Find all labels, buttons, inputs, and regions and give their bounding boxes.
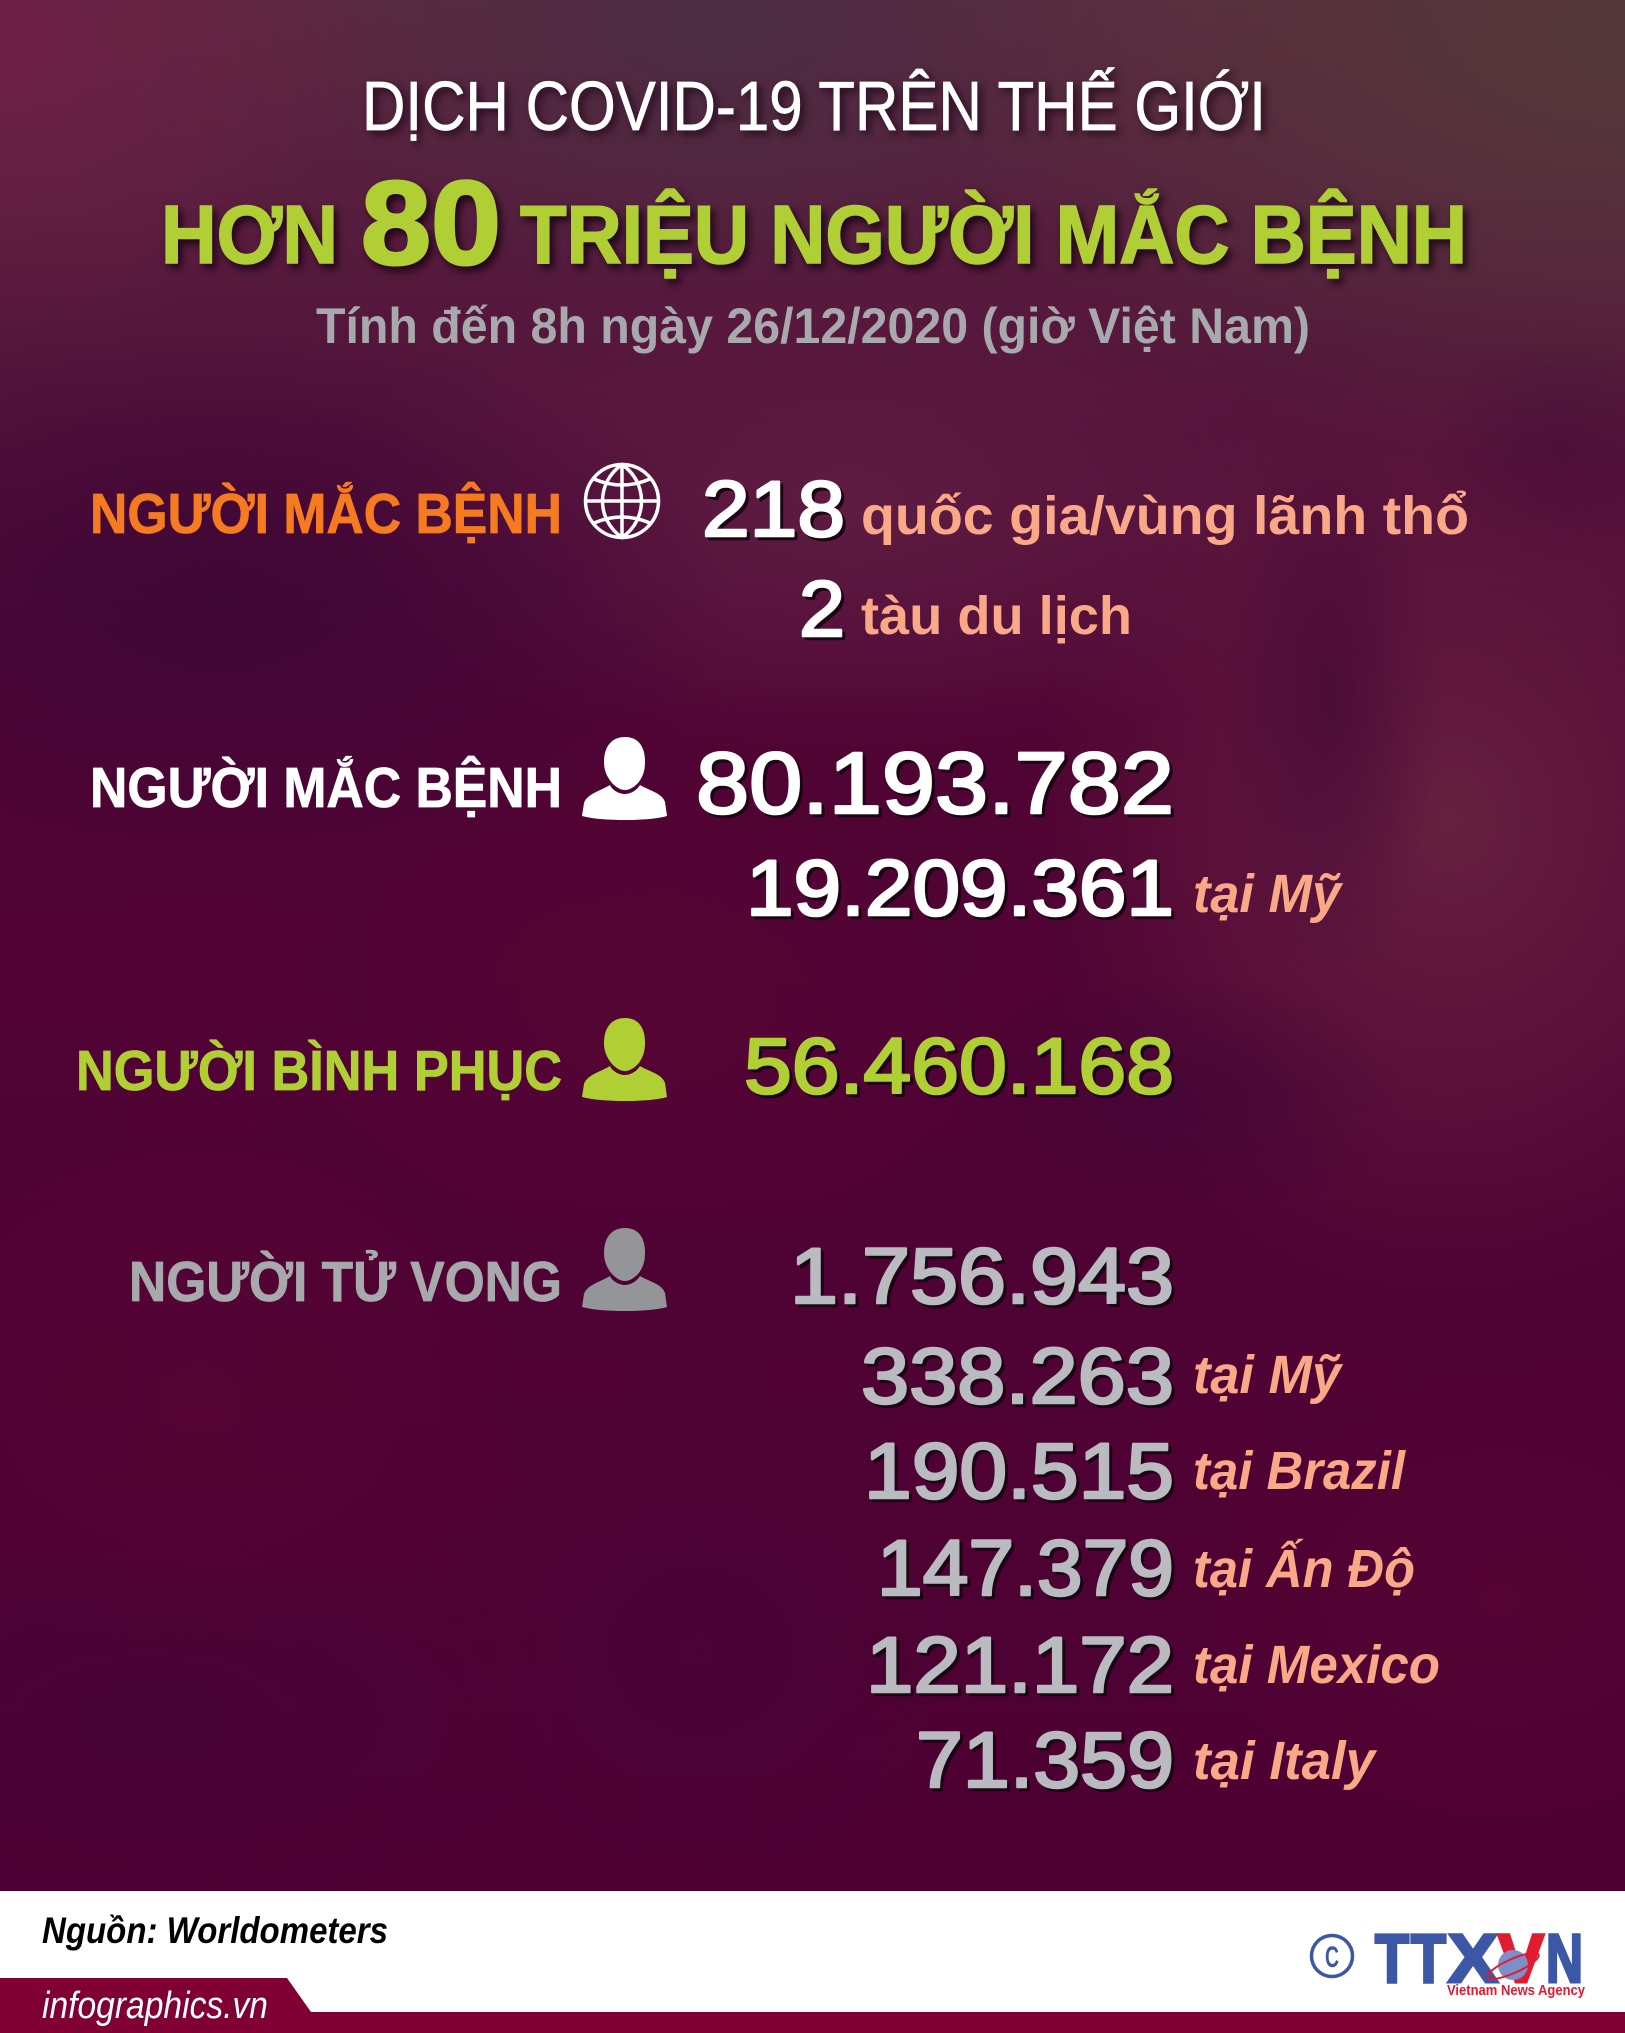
label: deaths: NGƯỜI TỬ VONG — [129, 1249, 562, 1314]
icon: person grey — [582, 1228, 667, 1311]
row: countries: tàu du lịch — [861, 586, 1132, 646]
value: recovered: 56.460.168 — [744, 1021, 1174, 1110]
value: Italy deaths: tại Italy — [1193, 1731, 1378, 1791]
source: Nguồn: Worldometers — [42, 1910, 388, 1951]
label: recovered: NGƯỜI BÌNH PHỤC — [76, 1039, 562, 1103]
icon: globe — [586, 464, 658, 538]
value: India deaths — [877, 1523, 1415, 1612]
value: Mexico deaths: 121.172 — [866, 1620, 1174, 1709]
row: countries — [90, 464, 1469, 653]
logo: TTXVN: T — [1411, 1920, 1446, 1997]
logo: TTXVN: N — [1546, 1920, 1583, 1997]
label: cases: NGƯỜI MẮC BỆNH — [90, 755, 562, 820]
row: deaths — [129, 1228, 1440, 1804]
title line 1: DỊCH COVID-19 TRÊN THẾ GIỚI — [362, 67, 1266, 145]
value: Italy deaths: 71.359 — [916, 1715, 1174, 1804]
value: India deaths: 147.379 — [877, 1523, 1174, 1612]
value: total cases: 80.193.782 — [696, 735, 1174, 832]
value: Brazil deaths — [864, 1426, 1406, 1515]
row: countries: quốc gia/vùng lãnh thổ — [861, 486, 1469, 546]
value: US deaths: 338.263 — [861, 1331, 1174, 1420]
logo: TTXVN: C — [1325, 1941, 1339, 1974]
label: countries: NGƯỜI MẮC BỆNH — [90, 481, 562, 546]
icon: person green — [582, 1018, 667, 1101]
value: India deaths: tại Ấn Độ — [1193, 1538, 1415, 1599]
value: Mexico deaths: tại Mexico — [1193, 1635, 1440, 1695]
website: infographics.vn — [42, 1985, 268, 2027]
subtitle: Tính đến 8h ngày 26/12/2020 (giờ Việt Nam) — [316, 298, 1310, 354]
title line 2: TRIỆU NGƯỜI MẮC BỆNH — [520, 188, 1467, 281]
row: cases — [90, 735, 1344, 932]
value: Italy deaths — [916, 1715, 1378, 1804]
title line 2: HƠN — [161, 188, 338, 281]
logo: TTXVN: X — [1448, 1920, 1498, 1997]
value: Brazil deaths: 190.515 — [864, 1426, 1174, 1515]
value: Mexico deaths — [866, 1620, 1440, 1709]
icon: person white — [582, 737, 667, 820]
title line 2: 80 — [361, 157, 501, 290]
value: US deaths: tại Mỹ — [1193, 1345, 1344, 1405]
logo: TTXVN: Vietnam News Agency — [1447, 1982, 1586, 1999]
value: Brazil deaths: tại Brazil — [1193, 1441, 1406, 1501]
row: recovered — [76, 1018, 1174, 1110]
footer tab — [0, 1978, 311, 2033]
value: 218 territories: 218 — [702, 464, 845, 553]
value: total deaths: 1.756.943 — [790, 1231, 1174, 1320]
value: US deaths — [861, 1331, 1344, 1420]
row: cases: tại Mỹ — [1193, 864, 1344, 924]
logo: TTXVN — [1312, 1920, 1586, 1999]
logo: TTXVN: T — [1375, 1920, 1409, 1997]
value: 2 cruise ships: 2 — [799, 564, 845, 653]
footer — [0, 1891, 1625, 2033]
title line 2 — [161, 157, 1467, 290]
logo: TTXVN: V — [1498, 1920, 1544, 1997]
header — [161, 67, 1467, 354]
value: US cases: 19.209.361 — [746, 843, 1174, 932]
